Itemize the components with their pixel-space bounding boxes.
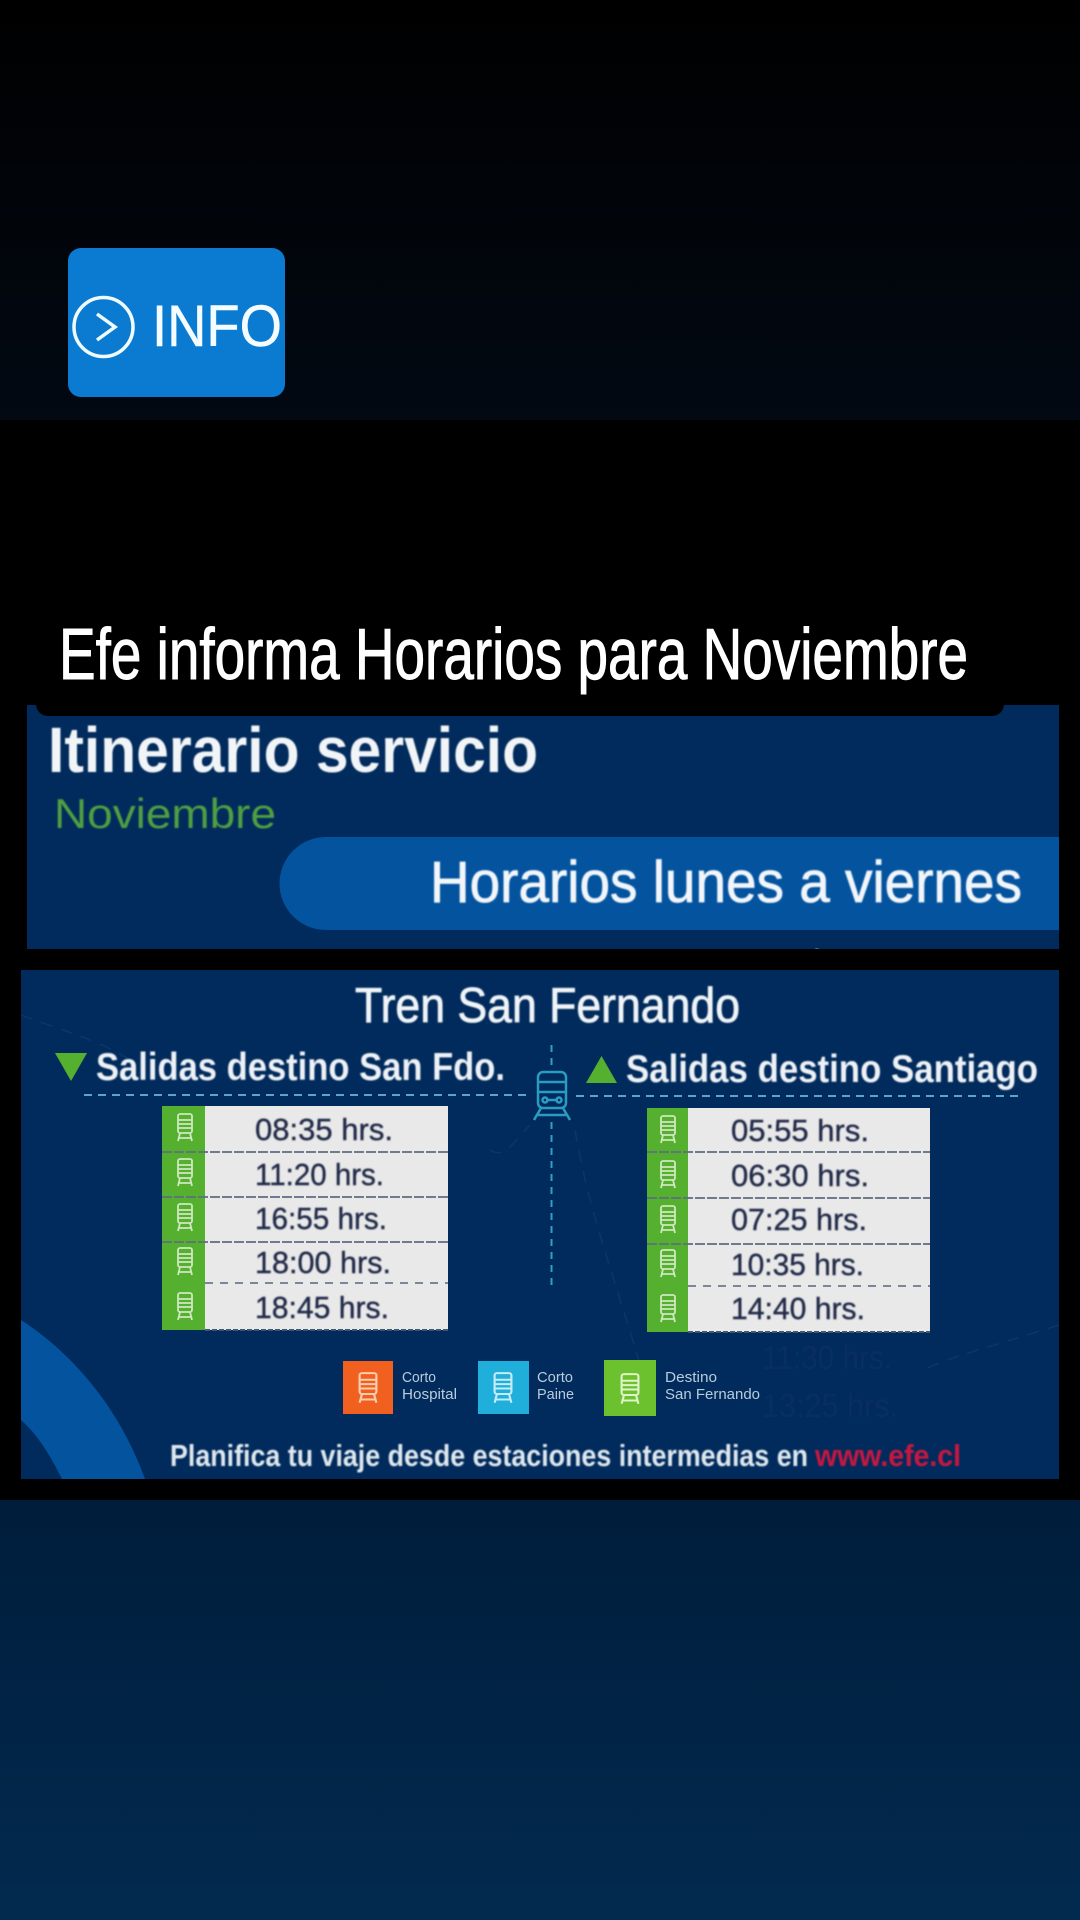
right timetable: 05:55 hrs. — [731, 1113, 869, 1148]
right timetable: 14:40 hrs. — [731, 1291, 865, 1326]
legend: Corto Hospital: Corto — [402, 1369, 436, 1386]
blue pill — [280, 837, 1059, 930]
legend: Destino San Fernando — [604, 1360, 760, 1416]
left timetable — [162, 1106, 448, 1330]
ghost times: 13:25 hrs. — [762, 1387, 898, 1424]
right timetable — [647, 1108, 930, 1332]
legend: Corto Hospital: Hospital — [402, 1386, 457, 1403]
right timetable: 10:35 hrs. — [731, 1247, 864, 1282]
left timetable: 18:00 hrs. — [255, 1245, 391, 1280]
legend: Corto Paine — [478, 1361, 574, 1414]
title bar — [36, 615, 1004, 716]
clipped heading fragment: Tren San Fernando — [540, 941, 840, 995]
column heading: San Fdo: Salidas destino San Fdo. — [96, 1046, 505, 1089]
left timetable: 18:45 hrs. — [255, 1290, 389, 1325]
ghost times — [764, 1345, 895, 1417]
legend: Corto Hospital — [343, 1361, 457, 1414]
heading: Tren San Fernando: Tren San Fernando — [355, 979, 740, 1033]
right timetable: 07:25 hrs. — [731, 1202, 867, 1237]
left timetable: 08:35 hrs. — [255, 1112, 393, 1147]
footer line: Planifica tu viaje desde estaciones intermedias en — [170, 1438, 808, 1473]
bottom background band — [0, 1500, 1080, 1920]
decorative arc — [21, 1320, 145, 1479]
left timetable: 16:55 hrs. — [255, 1201, 387, 1236]
icon: central train — [534, 1072, 570, 1120]
panel: Tren San Fernando schedule — [21, 970, 1059, 1479]
column heading: Santiago: Salidas destino Santiago — [626, 1048, 1038, 1091]
legend: Corto Paine: Corto — [537, 1369, 573, 1386]
INFO label: INFO — [152, 294, 282, 359]
footer link: www.efe.cl — [814, 1438, 961, 1473]
icon: up arrow — [586, 1056, 617, 1083]
right timetable: 06:30 hrs. — [731, 1158, 869, 1193]
panel: itinerario header — [27, 705, 1059, 949]
legend: Corto Paine: Paine — [537, 1386, 574, 1403]
legend: Destino San Fernando: San Fernando — [665, 1386, 760, 1403]
icon: down arrow — [55, 1053, 87, 1081]
icon: circled chevron — [74, 298, 133, 356]
pill label: Horarios lunes a viernes: Horarios lunes a viernes — [430, 850, 1022, 915]
heading: Itinerario servicio: Itinerario servicio — [48, 714, 538, 786]
INFO badge — [68, 248, 285, 397]
legend: Destino San Fernando: Destino — [665, 1369, 717, 1386]
left timetable: 11:20 hrs. — [255, 1157, 384, 1192]
ghost times: 11:30 hrs. — [762, 1339, 892, 1376]
legend — [343, 1360, 760, 1416]
subheading: Noviembre: Noviembre — [54, 790, 276, 837]
top background band — [0, 0, 1080, 420]
